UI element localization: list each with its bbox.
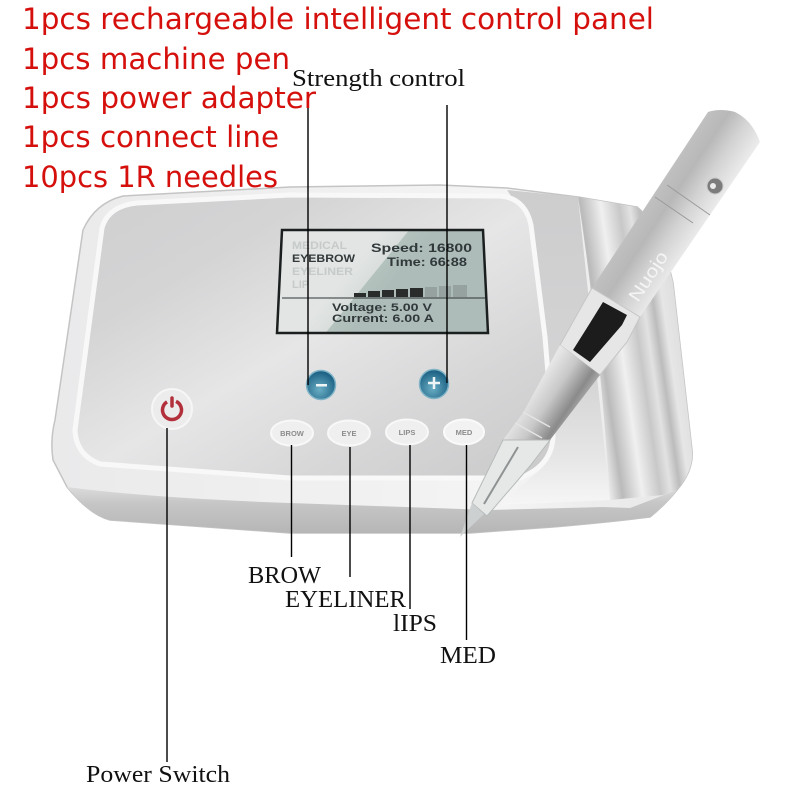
- LCD speed and time: [371, 243, 472, 269]
- LCD strength bars: [354, 285, 467, 297]
- LCD mode list: MEDICAL: [292, 240, 347, 252]
- LCD mode list: EYEBROW: [292, 253, 356, 265]
- callout labels: [86, 66, 496, 788]
- button: plus: [420, 370, 448, 398]
- pen side hole: [707, 178, 723, 194]
- top panel face: [75, 195, 553, 478]
- device: control panel body: [52, 185, 692, 533]
- button: LIPS: LIPS: [399, 428, 415, 437]
- pen collar: [560, 288, 640, 375]
- callout labels: lIPS: [393, 611, 437, 637]
- pen needle: [460, 503, 484, 537]
- pen black collar: [573, 302, 627, 362]
- LCD voltage and current: Current: 6.00 A: [332, 313, 434, 325]
- title: package contents: 1pcs power adapter: [22, 81, 317, 115]
- title: package contents: 1pcs rechargeable intelligent control panel: [22, 2, 654, 36]
- LCD speed and time: Time: 66:88: [387, 257, 468, 269]
- title: package contents: 1pcs machine pen: [22, 42, 290, 76]
- button: power: [152, 389, 192, 429]
- button: MED: [444, 420, 484, 444]
- callout labels: Power Switch: [86, 762, 230, 788]
- callout labels: BROW: [248, 563, 321, 589]
- pen clear tip: [472, 440, 550, 516]
- button: BROW: [271, 420, 313, 446]
- button: minus: [306, 370, 336, 400]
- title: package contents: 1pcs connect line: [22, 120, 279, 154]
- callout labels: MED: [440, 643, 496, 669]
- pen upper barrel: [592, 110, 760, 317]
- button: LIPS: [386, 420, 428, 444]
- title: package contents: [22, 2, 654, 194]
- LCD speed and time: Speed: 16800: [371, 243, 472, 255]
- callout labels: EYELINER: [285, 587, 406, 613]
- LCD mode list: EYELINER: [292, 266, 353, 278]
- machine pen: [460, 110, 760, 537]
- pen brand: Nuojo: [625, 247, 672, 305]
- leader lines: [167, 100, 466, 762]
- title: package contents: 10pcs 1R needles: [22, 160, 278, 194]
- LCD mode list: [292, 240, 356, 291]
- device underside: [67, 487, 677, 533]
- pen tray: [578, 197, 692, 500]
- LCD mode list: LIP: [292, 279, 309, 291]
- button: MED: MED: [456, 428, 473, 437]
- slope beside panel: [500, 190, 610, 505]
- button: EYE: [328, 420, 370, 446]
- callout labels: Strength control: [292, 66, 465, 92]
- LCD voltage and current: [332, 302, 434, 325]
- button: BROW: BROW: [280, 429, 305, 438]
- button: EYE: EYE: [341, 429, 357, 438]
- pen lower barrel: [503, 345, 600, 440]
- LCD screen: [277, 230, 488, 333]
- mode buttons: [271, 420, 484, 446]
- LCD voltage and current: Voltage: 5.00 V: [332, 302, 433, 314]
